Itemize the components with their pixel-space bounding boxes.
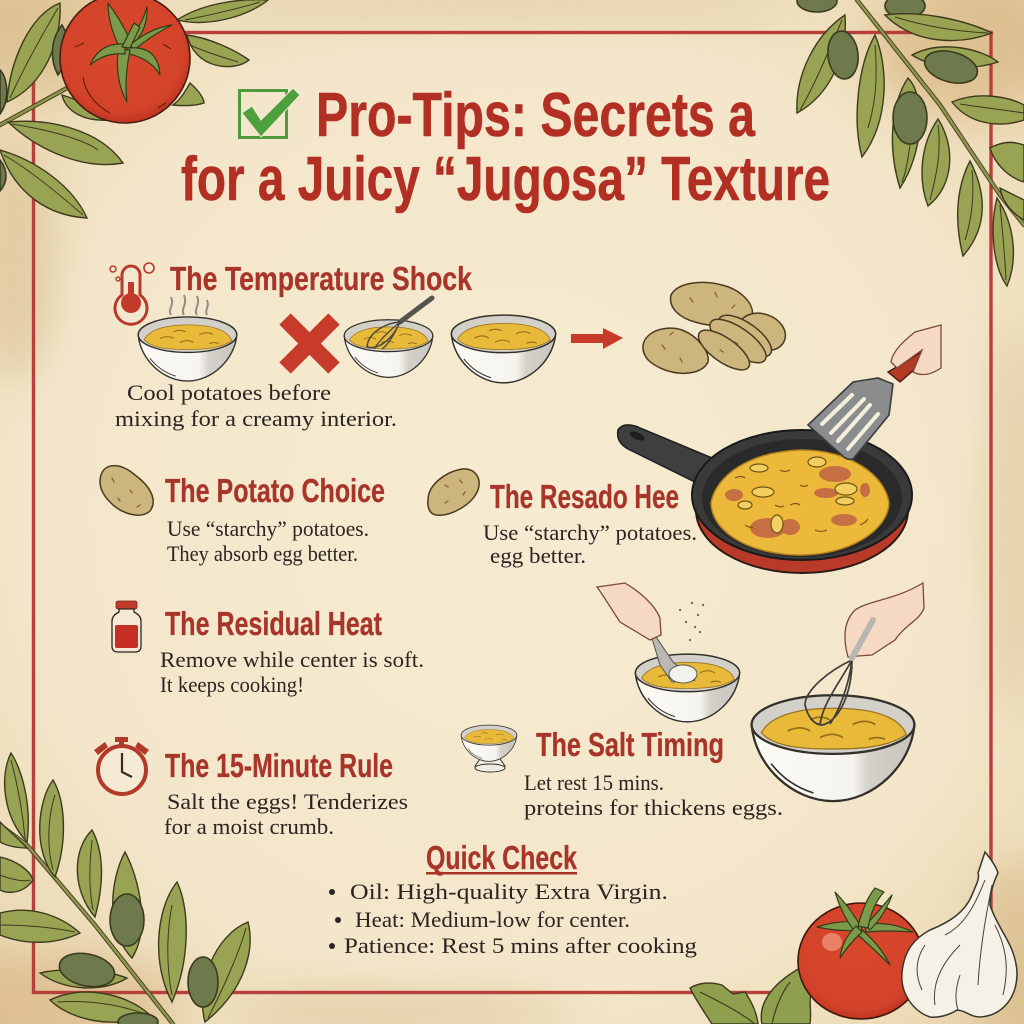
panel: the temperature shock (110, 260, 791, 431)
heading: The Potato Choice (165, 472, 385, 509)
panel: the potato choice (100, 466, 385, 566)
panel: the salt timing (461, 583, 924, 820)
heading: The Temperature Shock (170, 260, 473, 297)
spatula (808, 378, 893, 459)
skillet handle (618, 425, 712, 482)
panel: the 15-minute rule: for a moist crumb. (164, 814, 334, 839)
icon: tomato bottom-right (798, 888, 924, 1019)
icon: small bowl with hand and spoon (597, 583, 740, 722)
list (329, 879, 697, 958)
panel: the resado hee: egg better. (490, 543, 586, 568)
icon: hot bowl with steam (138, 295, 237, 381)
icon: small footed bowl (461, 725, 517, 772)
heading: The Residual Heat (165, 605, 382, 642)
decoration: top-right olive branch (797, 0, 1024, 286)
body text: Use “starchy” potatoes. (167, 516, 369, 541)
panel: the potato choice: They absorb egg better. (167, 541, 358, 566)
body text: Remove while center is soft. (160, 647, 424, 672)
icon: potato (428, 469, 479, 515)
tortilla (711, 450, 889, 555)
icon: jar (112, 601, 141, 652)
decoration: bottom-right tomato, garlic and basil (690, 852, 1017, 1024)
panel: the temperature shock: mixing for a creamy interior. (115, 406, 397, 431)
icon: stopwatch (94, 737, 149, 794)
panel: the 15-minute rule (94, 737, 408, 839)
panel: the residual heat: It keeps cooking! (160, 672, 304, 697)
panel: the salt timing: proteins for thickens eggs. (524, 795, 783, 820)
list: Heat: Medium-low for center. (355, 907, 630, 932)
heading: The Salt Timing (536, 726, 724, 763)
decoration: top-left olive branch and tomato (0, 0, 268, 218)
body text: Salt the eggs! Tenderizes (167, 789, 408, 814)
list: Oil: High-quality Extra Virgin. (350, 879, 668, 904)
icon: hand (891, 325, 941, 375)
icon: garlic (902, 852, 1017, 1017)
icon: green check box (240, 88, 300, 138)
icon: red arrow (571, 328, 623, 349)
heading: The 15-Minute Rule (165, 747, 393, 784)
title: Pro-Tips: Secrets a (316, 81, 755, 150)
decoration: bottom-left olive branch (0, 753, 250, 1024)
panel: the resado hee (428, 469, 697, 568)
heading: Quick Check (426, 839, 577, 876)
heading: The Resado Hee (490, 478, 679, 515)
icon: large bowl with whisk and hand (752, 583, 924, 801)
icon: thermometer (110, 263, 154, 324)
icon: tomato top-left (60, 0, 190, 123)
illustration: skillet with tortilla and spatula (618, 325, 941, 573)
title: for a Juicy “Jugosa” Texture (181, 145, 830, 214)
body text: Cool potatoes before (127, 380, 331, 405)
title (181, 81, 830, 214)
icon: potato (100, 466, 153, 515)
icon: red cross (285, 319, 334, 368)
icon: whole and sliced potatoes (643, 282, 791, 377)
icon: basil leaves (690, 968, 812, 1024)
panel: quick check (329, 839, 697, 958)
icon: cooled bowl (451, 315, 556, 383)
body text: Let rest 15 mins. (524, 770, 664, 795)
icon: bowl with whisk (344, 298, 433, 377)
panel: the residual heat (112, 601, 424, 697)
body text: Use “starchy” potatoes. (483, 520, 697, 545)
skillet body (696, 447, 908, 573)
list: Patience: Rest 5 mins after cooking (344, 933, 697, 958)
